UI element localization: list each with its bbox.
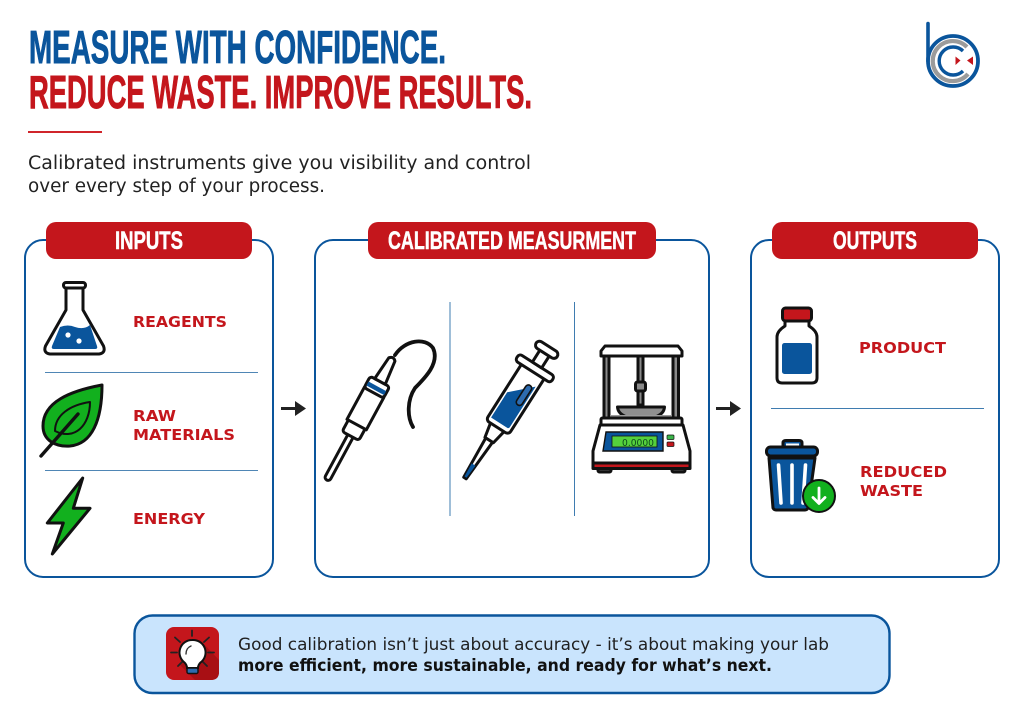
panel: inputs [25,222,273,577]
icon: pipette [447,335,567,489]
callout text: Good calibration isn’t just about accuracy - it’s about making your lab [238,635,829,654]
icon: leaf [41,385,102,456]
callout text: more efficient, more sustainable, and ready for what’s next. [238,656,772,675]
icon: trash bin with down arrow [766,440,835,512]
heading: calibrated measurment: CALIBRATED MEASURMENT [388,227,636,255]
callout text [238,635,829,675]
heading: inputs: INPUTS [115,227,183,255]
subtitle: over every step of your process. [28,176,325,197]
icon: balance: 0.0000 [622,438,654,449]
title: REDUCE WASTE. IMPROVE RESULTS. [29,66,532,118]
heading: outputs: OUTPUTS [833,227,917,255]
label: reduced waste: REDUCED [860,463,947,481]
subtitle: Calibrated instruments give you visibility and control [28,153,531,174]
panel: calibrated measurement [315,222,709,577]
icon: balance [593,346,690,472]
label: raw materials: MATERIALS [133,426,235,444]
label: product: PRODUCT [859,339,947,357]
icon: flask [45,282,104,354]
title: MEASURE WITH CONFIDENCE. [29,21,446,73]
label: reduced waste: WASTE [860,482,923,500]
label: reagents: REAGENTS [133,313,227,331]
icon: light bulb [166,627,219,680]
heading: inputs [46,222,252,259]
label: raw materials: RAW [133,407,177,425]
arrow: inputs to measurement [281,401,306,416]
subtitle [28,153,531,197]
heading: outputs [772,222,978,259]
label: energy: ENERGY [133,510,206,528]
title [29,21,532,118]
icon: lightning bolt [47,478,90,554]
panel: outputs [751,222,999,577]
callout [134,616,890,693]
icon: probe [317,341,435,485]
logo [928,24,978,86]
label: reduced waste [860,463,947,500]
icon: bottle [777,308,817,383]
arrow: measurement to outputs [716,401,741,416]
label: raw materials [133,407,235,444]
heading: calibrated measurment [368,222,656,259]
